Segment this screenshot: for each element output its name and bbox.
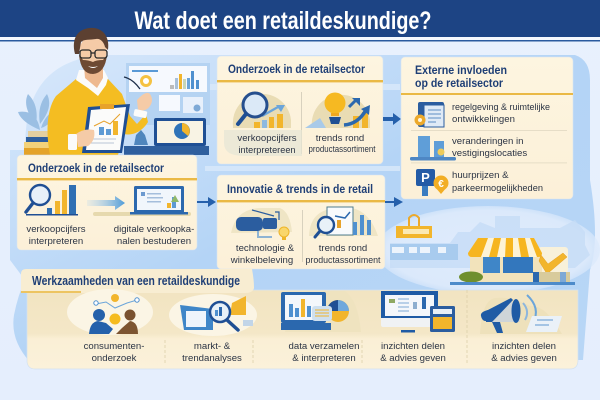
text: trends rond: trends rond — [319, 243, 367, 254]
text: verkoopcijfers — [26, 224, 86, 247]
text: trends rond: productassortiment — [306, 255, 381, 266]
text — [380, 341, 446, 364]
crates — [533, 272, 570, 282]
text: veranderingen: vestigingslocaties — [452, 148, 527, 159]
sweater — [48, 79, 148, 155]
text: & interpreteren — [292, 353, 356, 364]
item: data verzamelen — [281, 291, 361, 364]
icon: parking and euro — [416, 169, 448, 196]
background blue shape — [10, 55, 595, 362]
item: inzichten monitor — [380, 291, 455, 364]
text: digitale verkoopkanalen — [114, 224, 194, 247]
checkmark — [539, 253, 567, 274]
arrow: middle to external — [383, 113, 401, 125]
text: huurprijzen: huurprijzen & — [452, 170, 509, 181]
text: trends rond — [308, 133, 376, 155]
icon: light bulb with arrows — [305, 92, 370, 128]
text: & advies geven — [491, 353, 557, 364]
text: veranderingen — [452, 136, 527, 159]
text: inzichten delen — [381, 341, 445, 352]
text — [491, 341, 557, 364]
text: onderzoek — [92, 353, 137, 364]
text: digitale verkoopkanalen: digitale verkoopka- — [114, 224, 194, 235]
beard — [79, 55, 107, 74]
text: digitale verkoopkanalen: nalen bestuderen — [117, 236, 191, 247]
illustration: city skyline — [376, 206, 600, 294]
glasses — [80, 50, 107, 58]
heading: Werkzaamheden van een retaildeskundige — [32, 274, 240, 288]
heading: Innovatie & trends in de retail — [227, 182, 373, 196]
text: technologie — [230, 243, 295, 266]
label backdrop — [224, 130, 302, 156]
text: regelgeving: ontwikkelingen — [452, 114, 515, 125]
heading: Onderzoek in de retailsector — [28, 161, 164, 175]
icon: laptop digital channels — [93, 186, 191, 216]
panel: externe invloeden — [401, 57, 573, 199]
text: data verzamelen — [289, 341, 359, 352]
awning — [468, 238, 542, 257]
icon: regulation document — [414, 102, 444, 127]
heading: Onderzoek in de retailsector — [228, 62, 365, 76]
text: veranderingen: veranderingen in — [452, 136, 523, 147]
arrow — [87, 196, 125, 210]
text: huurprijzen: parkeermogelijkheden — [452, 183, 543, 194]
item: consumentenonderzoek — [67, 289, 153, 364]
icon: magnifier with rising bars — [233, 93, 291, 128]
text: & advies geven — [380, 353, 446, 364]
text: trendanalyses — [182, 353, 242, 364]
text: consumenten- — [84, 341, 144, 352]
title bar — [0, 0, 600, 42]
text: verkoopcijfers — [237, 133, 297, 156]
illustration: analytics wall screen — [126, 63, 210, 125]
illustration: laptop with pie chart — [124, 118, 209, 155]
icon: magnifier and trend chart — [309, 207, 378, 237]
face — [80, 38, 107, 74]
illustration: plant and books — [18, 94, 64, 155]
hair — [74, 28, 108, 54]
icon: magnifier with bars — [26, 185, 78, 216]
text: regelgeving: regelgeving & ruimtelijke — [452, 102, 550, 113]
holding hand — [76, 130, 94, 147]
text: trends rond: trends rond — [316, 133, 364, 144]
text — [289, 341, 359, 364]
text: technologie: winkelbeleving — [230, 255, 293, 266]
item: markt en trendanalyses — [169, 294, 257, 364]
panel: innovatie — [217, 175, 385, 269]
ground — [450, 282, 575, 285]
neck — [84, 66, 103, 88]
text: huurprijzen — [452, 170, 543, 194]
icon: parking and euro: € — [438, 179, 444, 190]
text: verkoopcijfers: verkoopcijfers — [237, 133, 297, 144]
text: trends rond: productassortiment — [308, 144, 376, 155]
arrow: innovation to city — [385, 197, 403, 207]
heading: op de retailsector — [415, 76, 503, 90]
clipboard with chart — [82, 104, 130, 153]
text — [182, 341, 242, 364]
text: verkoopcijfers: interpretereen — [238, 145, 296, 156]
panel: onderzoek middle — [217, 56, 383, 164]
heading — [415, 63, 507, 90]
item: megaphone — [480, 295, 562, 364]
panel: onderzoek left — [17, 155, 197, 250]
text — [84, 341, 144, 364]
icon: parking and euro: P — [421, 170, 430, 185]
icon: VR headset — [231, 208, 292, 240]
illustration: shop front — [450, 238, 575, 285]
text: trends rond — [306, 243, 381, 266]
heading: Externe invloeden — [415, 63, 507, 77]
text: verkoopcijfers: interpreteren — [29, 236, 83, 247]
text: inzichten delen — [492, 341, 556, 352]
bush — [459, 272, 483, 282]
illustration: retail expert — [48, 28, 152, 155]
text: verkoopcijfers: verkoopcijfers — [26, 224, 86, 235]
text: technologie: technologie & — [236, 243, 295, 254]
collar — [76, 70, 108, 96]
arrow: left to innovation — [197, 197, 216, 207]
pointing hand and pen — [137, 93, 152, 110]
icon: buildings — [410, 136, 456, 160]
text: markt- & — [194, 341, 231, 352]
panel: werkzaamheden — [21, 269, 578, 369]
text: regelgeving — [452, 102, 550, 125]
title: Wat doet een retaildeskundige? — [134, 7, 432, 35]
